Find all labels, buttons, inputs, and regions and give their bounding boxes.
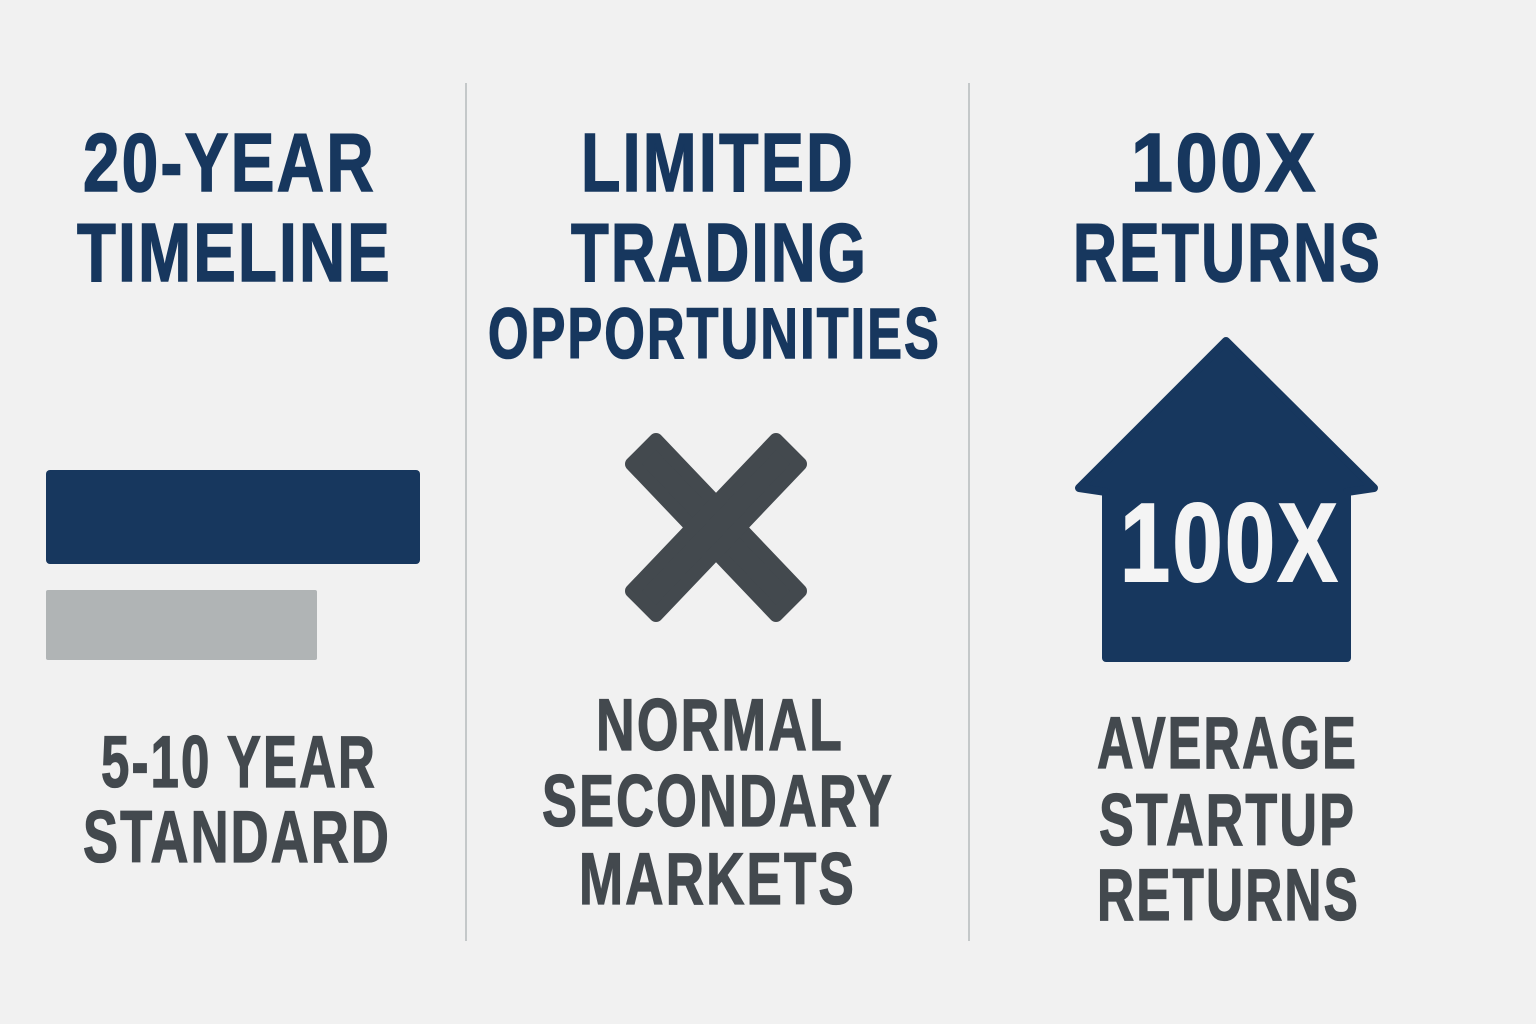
icon: house with 100X: 100X bbox=[1120, 481, 1340, 605]
label: normal secondary markets: NORMAL bbox=[596, 685, 844, 766]
heading: 20-year timeline: TIMELINE bbox=[77, 206, 392, 299]
bar: 5-10 year standard bbox=[46, 590, 317, 660]
label: 5-10 year standard bbox=[83, 722, 391, 878]
label: normal secondary markets bbox=[542, 685, 894, 920]
heading: 100x returns: RETURNS bbox=[1073, 206, 1382, 299]
label: normal secondary markets: SECONDARY bbox=[542, 761, 894, 842]
panel: 100x returns bbox=[1073, 116, 1382, 936]
icon: house with 100X bbox=[1079, 341, 1374, 658]
label: average startup returns: AVERAGE bbox=[1097, 703, 1358, 784]
heading: 20-year timeline: 20-YEAR bbox=[83, 116, 376, 209]
label: average startup returns: RETURNS bbox=[1097, 855, 1360, 936]
heading: 100x returns bbox=[1073, 116, 1382, 299]
icon: X mark bbox=[632, 440, 800, 615]
heading: 100x returns: 100X bbox=[1131, 116, 1318, 209]
label: average startup returns bbox=[1097, 703, 1360, 936]
bar: 20-year timeline bbox=[46, 470, 420, 564]
panel: limited trading opportunities bbox=[488, 116, 941, 920]
heading: limited trading opportunities: LIMITED bbox=[581, 116, 855, 209]
heading: limited trading opportunities: OPPORTUNITIES bbox=[488, 295, 941, 374]
label: average startup returns: STARTUP bbox=[1099, 780, 1356, 861]
heading: limited trading opportunities: TRADING bbox=[571, 206, 868, 299]
heading: 20-year timeline bbox=[77, 116, 392, 299]
label: 5-10 year standard: STANDARD bbox=[83, 797, 391, 878]
label: 5-10 year standard: 5-10 YEAR bbox=[101, 722, 377, 803]
label: normal secondary markets: MARKETS bbox=[579, 839, 856, 920]
heading: limited trading opportunities bbox=[488, 116, 941, 374]
panel: 20-year timeline bbox=[46, 116, 420, 878]
